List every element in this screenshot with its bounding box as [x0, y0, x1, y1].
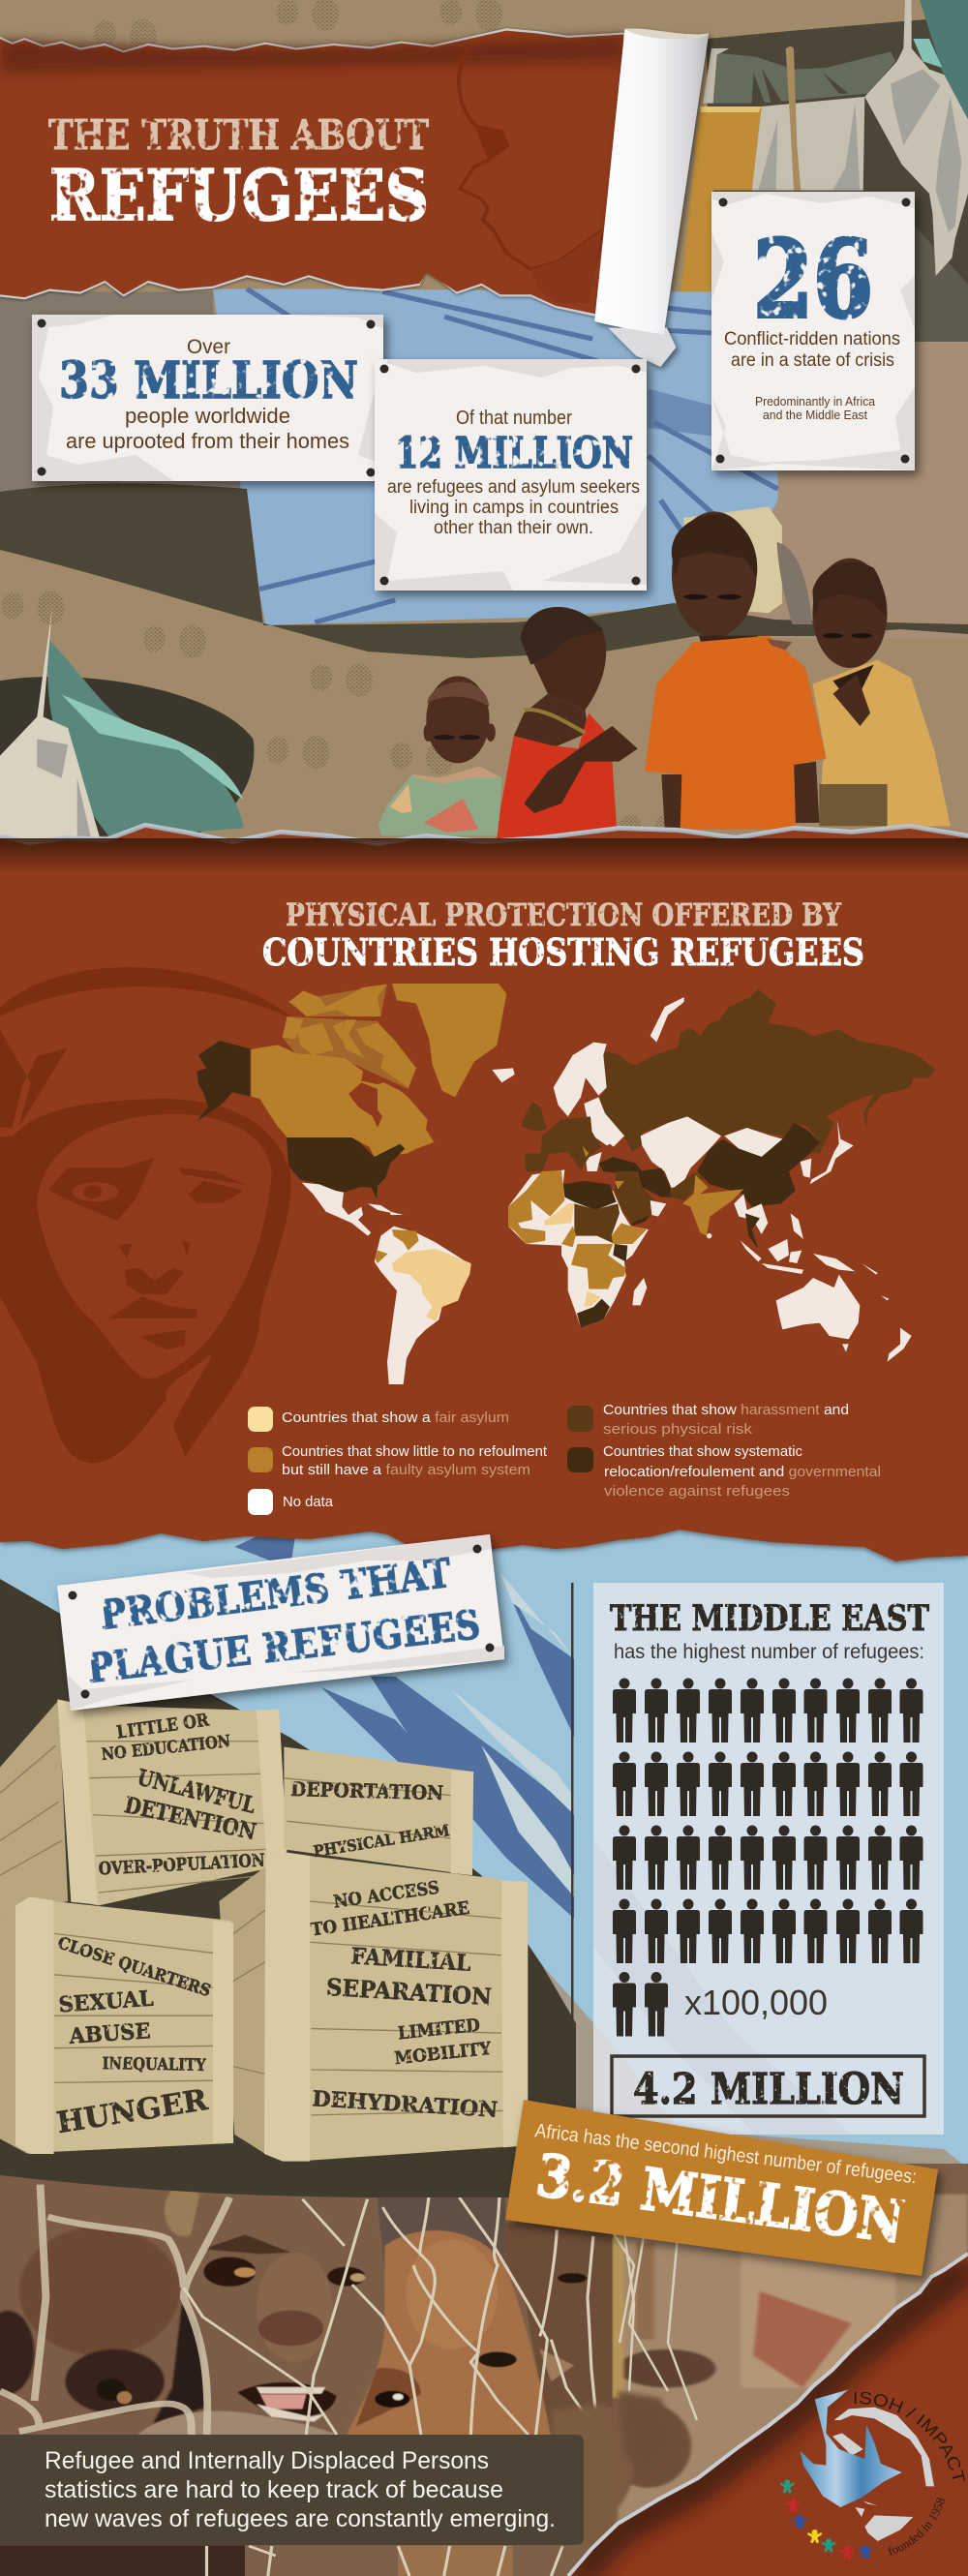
usa: [287, 1137, 405, 1198]
text: middle east note: and the Middle East: [763, 409, 868, 422]
hands on fence: [552, 2391, 682, 2545]
crate labels: ABUSE: [68, 2018, 151, 2049]
iceland: [492, 1068, 515, 1082]
callout: statistics note: Refugee and Internally Displaced Persons: [45, 2447, 489, 2474]
legend: systematic relocation: relocation/refoulement and governmental: [604, 1464, 881, 1480]
pictogram: people: [613, 1679, 923, 2037]
callout: statistics note: [0, 2435, 584, 2545]
footprints: [1, 0, 681, 847]
legend: no data: [248, 1489, 334, 1515]
legend: systematic relocation: Countries that show systematic: [603, 1443, 802, 1460]
child 3: [645, 511, 826, 833]
dark ground edge over photo: [0, 2130, 542, 2197]
africa sentence: Africa has the second highest number of refugees:: [533, 2120, 918, 2188]
text: living in camps: living in camps in countries: [409, 498, 619, 518]
crate labels: PHYSICAL HARM: [313, 1821, 451, 1861]
crates: [0, 1699, 528, 2162]
blue cloth streaks: [234, 1530, 574, 1919]
silhouette: profile of a face: [459, 47, 602, 303]
sign: problems that plague refugees: [57, 1534, 504, 1711]
child 4: [812, 559, 951, 826]
title: [48, 111, 429, 236]
south america: [375, 1227, 471, 1384]
crate labels: CLOSE QUARTERS: [55, 1933, 213, 2001]
sign line 1: PROBLEMS THAT: [97, 1550, 454, 1639]
dove: [801, 2389, 902, 2507]
child 2: [497, 607, 638, 839]
stat box: 4.2 million: 4.2 MILLION: [633, 2065, 904, 2114]
crate labels: LIMITED: [397, 2015, 481, 2044]
crate labels: [54, 1710, 499, 2140]
page base: red: [0, 2227, 968, 2576]
text: crisis: are in a state of crisis: [731, 350, 894, 371]
centre face: [137, 2197, 384, 2435]
callout: statistics note: new waves of refugees are constantly emerging.: [45, 2505, 556, 2532]
crate labels: OVER-POPULATION: [98, 1851, 265, 1879]
text: refugees and asylum seekers: are refugees and asylum seekers: [387, 477, 640, 498]
crate behind children: [683, 506, 782, 613]
arctic backing: [283, 985, 416, 1089]
dark gap: [153, 2304, 207, 2423]
silhouette: woman's face in headscarf: [0, 967, 296, 1463]
crate labels: MOBILITY: [394, 2039, 493, 2069]
india: [682, 1174, 743, 1236]
callout: statistics note: statistics are hard to keep track of because: [45, 2476, 503, 2503]
paper roll: [594, 29, 709, 367]
title line 1: THE TRUTH ABOUT: [48, 111, 429, 159]
third face: [347, 2197, 551, 2435]
legend: harassment: [567, 1402, 849, 1438]
stat: 33 million: 33 MILLION: [59, 351, 358, 410]
map title: [262, 896, 864, 974]
text: conflict-ridden: Conflict-ridden nations: [724, 329, 900, 349]
sign: africa 3.2 million: [505, 2100, 938, 2276]
mongolia: [724, 1128, 789, 1157]
stat: 26: 26: [753, 217, 873, 342]
crate labels: DETENTION: [122, 1792, 258, 1845]
legend: systematic relocation: [567, 1443, 881, 1500]
left face: [0, 2191, 200, 2415]
sign line 2: PLAGUE REFUGEES: [85, 1601, 483, 1692]
text: predominantly: Predominantly in Africa: [755, 395, 875, 409]
child 1: [378, 676, 502, 835]
dark ground band: [0, 483, 968, 658]
card: 26 nations: [711, 192, 915, 470]
china: [697, 1123, 820, 1207]
world map section: red panel: [0, 826, 968, 1561]
torn red panel at top: [0, 28, 630, 318]
arctic islands: [283, 985, 416, 1087]
crate labels: SEXUAL: [58, 1986, 154, 2017]
stat: 3.2 million: 3.2 MILLION: [532, 2141, 908, 2258]
crate labels: HUNGER: [54, 2083, 211, 2140]
greenland: [392, 984, 506, 1097]
russia: [600, 989, 936, 1154]
card: 33 million: [32, 315, 383, 481]
western europe: [521, 1102, 602, 1171]
fence wire thin: [184, 2195, 597, 2576]
scandinavia: [554, 1043, 607, 1116]
legend: harassment: serious physical risk: [603, 1421, 753, 1438]
map title line 2: COUNTRIES HOSTING REFUGEES: [262, 930, 864, 974]
central asia: [641, 1116, 721, 1188]
legend: faulty asylum: [248, 1443, 548, 1478]
crate labels: SEPARATION: [325, 1973, 493, 2011]
illustration: camp scene behind top section: [0, 288, 968, 844]
legend: harassment: Countries that show harassment and: [603, 1402, 849, 1418]
illustration: washing line and tents top right: [681, 0, 968, 342]
south east asia: [734, 1194, 889, 1300]
mexico and caribbean: [302, 1183, 404, 1236]
crate labels: LITTLE OR: [115, 1710, 211, 1743]
world map: [197, 984, 936, 1384]
fourth face: [505, 2224, 613, 2437]
novaya zemlya: [650, 997, 684, 1043]
legend: no data: No data: [283, 1494, 334, 1510]
hand: [606, 2407, 612, 2420]
crate labels: INEQUALITY: [102, 2054, 206, 2076]
text: uprooted: are uprooted from their homes: [66, 429, 349, 453]
logo: ISOH / IMPACT: [780, 2389, 966, 2560]
fence wire far right: [613, 2234, 699, 2420]
crate labels: NO EDUCATION: [101, 1732, 231, 1765]
logo name: ISOH / IMPACT: [854, 2391, 966, 2481]
text: people worldwide: people worldwide: [125, 404, 290, 428]
title line 2: REFUGEES: [49, 154, 429, 236]
crate: back right: [284, 1747, 473, 1875]
eastern europe: [584, 1097, 624, 1171]
crate labels: NO ACCESS: [332, 1878, 440, 1913]
text: over: Over: [187, 336, 230, 358]
lower area: [0, 2545, 245, 2576]
americas: [197, 984, 515, 1384]
japan and korea: [801, 1120, 854, 1184]
dark hill: [503, 1965, 968, 2254]
children figures: [780, 2479, 795, 2494]
crate: front right: [219, 1852, 528, 2162]
map title line 1: PHYSICAL PROTECTION OFFERED BY: [286, 896, 842, 933]
photo: four children: [378, 506, 951, 839]
crate: front left: [0, 1896, 233, 2154]
oceania: [776, 1275, 912, 1362]
shadow on red along tear: [576, 2265, 968, 2576]
card: 12 million: [375, 359, 647, 591]
fence wire thick: [0, 2185, 229, 2435]
text: of that number: Of that number: [456, 408, 572, 429]
crate labels: TO HEALTHCARE: [310, 1898, 470, 1940]
text: other than own: other than their own.: [434, 518, 593, 538]
divider line: [571, 1583, 573, 2135]
crate: back left: [0, 1699, 287, 1919]
subheading: has the highest number of refugees:: [614, 1641, 924, 1663]
legend: fair asylum: Countries that show a fair asylum: [282, 1409, 509, 1426]
crate labels: DEPORTATION: [290, 1777, 443, 1804]
panel: middle east: [593, 1583, 944, 2135]
legend: faulty asylum: Countries that show little to no refoulment: [282, 1443, 548, 1460]
africa: [508, 1169, 649, 1328]
alaska: [197, 1041, 250, 1121]
distant figures: [612, 2194, 968, 2522]
multiplier label: x100,000: [684, 1983, 828, 2022]
crate labels: FAMILIAL: [350, 1943, 471, 1977]
eastern hemisphere: [508, 989, 936, 1362]
globe: [832, 2408, 934, 2541]
middle east: [598, 1157, 673, 1226]
legend: [248, 1402, 881, 1515]
torn edge highlight on photo: [568, 2254, 968, 2576]
shadow figure: [777, 542, 812, 624]
stat: 12 million: 12 MILLION: [395, 429, 633, 478]
crate labels: UNLAWFUL: [135, 1765, 258, 1819]
canada: [251, 1045, 434, 1157]
problems section background: sky: [0, 1530, 968, 2254]
logo founded: founded in 1958: [889, 2498, 945, 2556]
photo: faces behind fence: [0, 2164, 968, 2576]
legend: systematic relocation: violence against refugees: [604, 1483, 790, 1500]
crate labels: DEHYDRATION: [312, 2086, 499, 2123]
section background: paper: [0, 0, 968, 852]
legend: faulty asylum: but still have a faulty asylum system: [282, 1462, 530, 1478]
legend: fair asylum: [248, 1407, 509, 1432]
